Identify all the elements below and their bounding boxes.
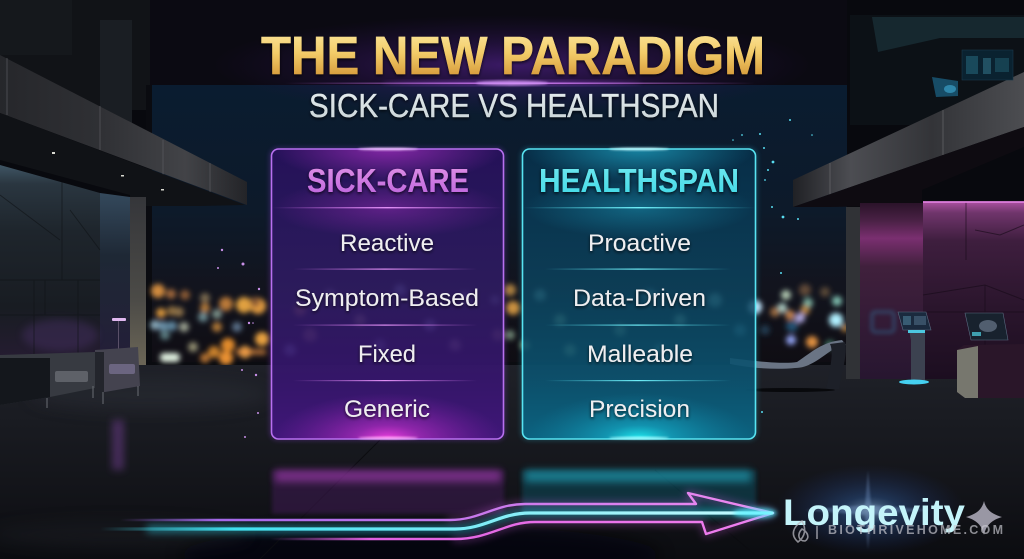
floor reflection: lamp [112, 420, 124, 470]
list: sick-care items: Reactive [340, 230, 434, 257]
longevity label: Longevity [783, 492, 965, 533]
watermark: BIOTHRIVEHOME.COM [828, 523, 1003, 537]
icon: watermark leaf [793, 521, 817, 542]
particles: right of card [732, 119, 813, 413]
list: sick-care items: Symptom-Based [295, 285, 479, 312]
lobby sofas [0, 347, 140, 408]
city bokeh lights [150, 284, 849, 365]
list: healthspan items: Precision [589, 396, 690, 423]
longevity lens flare [775, 465, 965, 555]
list: sick-care items [295, 230, 479, 423]
particles: left of card [217, 249, 260, 438]
window with night sky [146, 85, 847, 366]
kiosk right with cabinet [957, 313, 1024, 398]
list: healthspan items: Data-Driven [573, 285, 706, 312]
list: healthspan items: Malleable [587, 341, 693, 368]
list: healthspan items: Proactive [588, 230, 691, 257]
floor reflection: cards [272, 470, 756, 514]
list: healthspan items [573, 230, 706, 423]
left stone wall and column [0, 152, 164, 370]
floor [0, 365, 1024, 559]
panel: healthspan [518, 146, 760, 442]
heading: healthspan: HEALTHSPAN [539, 162, 739, 199]
icon: sparkle star [966, 501, 1002, 535]
title: THE NEW PARADIGM [261, 26, 765, 86]
arrow tip glow [733, 508, 777, 518]
floor lamp [112, 318, 126, 349]
upper right screens [932, 50, 1013, 97]
ghost screen reflection on column [872, 312, 894, 332]
upper ceiling and balcony, left [0, 55, 247, 206]
lounge chair [730, 340, 846, 392]
list: sick-care items: Generic [344, 396, 430, 423]
arrow: growth path to longevity [100, 493, 773, 539]
right ceiling beam [793, 72, 1024, 207]
title band [150, 0, 847, 115]
list: sick-care items: Fixed [358, 341, 416, 368]
heading: sick-care: SICK-CARE [307, 162, 469, 199]
kiosk left [898, 312, 931, 384]
right column and pillar [846, 201, 1024, 379]
panel: sick-care [267, 145, 508, 443]
subtitle: SICK-CARE VS HEALTHSPAN [309, 87, 719, 124]
